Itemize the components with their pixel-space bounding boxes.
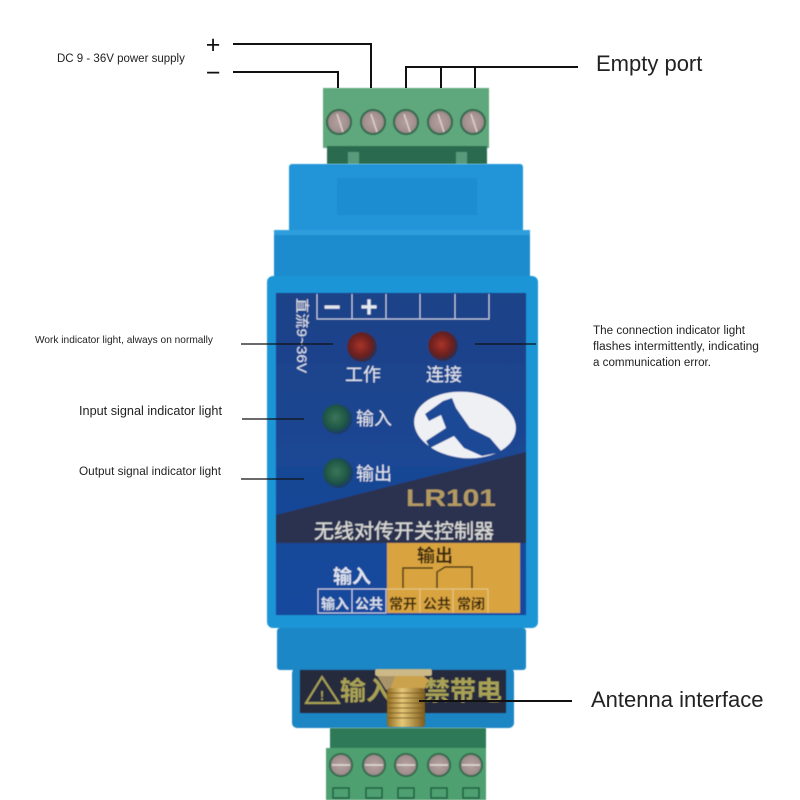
power sign labels: − bbox=[323, 291, 341, 324]
front label panel: 常闭 bbox=[457, 596, 485, 612]
horse logo bbox=[411, 387, 519, 463]
front label panel: 常开 bbox=[389, 596, 417, 612]
warning plate: ! bbox=[320, 688, 324, 703]
callout: antenna interface: Antenna interface bbox=[591, 687, 763, 712]
warning plate: 禁带电 bbox=[424, 676, 502, 706]
front label panel: 公共 bbox=[355, 596, 383, 612]
antenna connector bbox=[375, 669, 432, 727]
callout: empty port bbox=[406, 51, 702, 88]
relay contact symbol bbox=[403, 567, 472, 588]
input and output headings: 输入 bbox=[333, 565, 371, 588]
bottom terminal block bbox=[326, 728, 486, 800]
front label panel: 连接 bbox=[426, 365, 462, 385]
indicator labels: 工作 bbox=[345, 365, 381, 385]
vertical voltage label: 直流9~36V bbox=[294, 298, 310, 374]
terminal legend grid bbox=[317, 294, 489, 613]
callout: connection indicator: a communication error. bbox=[593, 357, 711, 369]
callout: empty port: Empty port bbox=[596, 51, 702, 76]
front label panel: 输出 bbox=[417, 545, 453, 566]
callout: connection indicator: The connection indicator light bbox=[593, 325, 746, 337]
top terminal block bbox=[323, 88, 489, 164]
front label panel: 输出 bbox=[356, 464, 392, 484]
callout: power supply: DC 9 - 36V power supply bbox=[57, 53, 185, 65]
front label panel bbox=[276, 291, 526, 615]
callout: connection indicator bbox=[475, 325, 759, 369]
callout: power supply: − bbox=[206, 59, 220, 87]
callout: input indicator: Input signal indicator light bbox=[79, 404, 223, 418]
callout: connection indicator: flashes intermittently, indicating bbox=[593, 341, 759, 353]
front label panel: 输入 bbox=[356, 409, 392, 429]
front label panel: + bbox=[360, 291, 378, 324]
indicator lights bbox=[347, 332, 377, 362]
warning plate bbox=[300, 670, 506, 713]
terminal names: 输入 bbox=[321, 596, 349, 612]
model number: LR101 bbox=[406, 485, 496, 512]
callout: power supply: + bbox=[206, 31, 220, 59]
front label panel: 公共 bbox=[423, 596, 451, 612]
callout: work indicator: Work indicator light, always on normally bbox=[35, 334, 214, 346]
device body bbox=[267, 164, 538, 728]
product name: 无线对传开关控制器 bbox=[314, 520, 494, 543]
callout: output indicator: Output signal indicator light bbox=[79, 464, 222, 478]
callout: power supply bbox=[57, 31, 371, 88]
warning plate: 输入 bbox=[340, 676, 392, 706]
